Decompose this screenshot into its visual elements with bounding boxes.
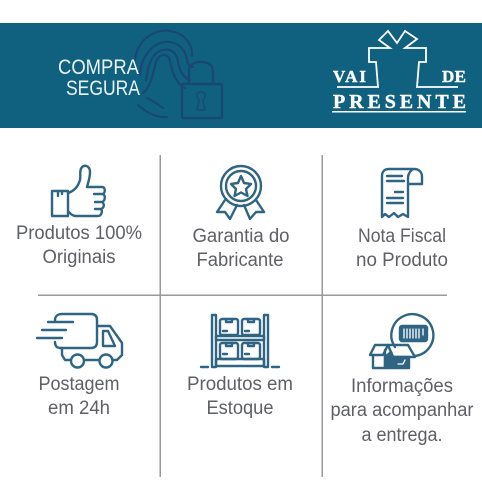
- icon: medal: [217, 166, 264, 219]
- text: Produtos em: [187, 374, 293, 395]
- logo words: DE: [442, 67, 466, 86]
- panel: postagem: [37, 314, 122, 419]
- logo words: VAI: [333, 67, 366, 86]
- panel: informacoes: [330, 314, 474, 446]
- banner: [0, 23, 482, 128]
- text: Postagem: [38, 374, 120, 395]
- heading: compra segura: [58, 56, 140, 100]
- text: Produtos 100%: [16, 223, 142, 244]
- text: Nota Fiscal: [358, 226, 446, 247]
- icon: warehouse shelf: [201, 315, 279, 367]
- panel: garantia: [192, 166, 290, 271]
- icon: gift box outline: [337, 31, 458, 87]
- panel: nota fiscal: no Produto: [356, 250, 448, 271]
- heading: compra segura: COMPRA: [58, 56, 139, 79]
- text: Garantia do: [192, 226, 290, 247]
- panel: produtos originais: [16, 166, 142, 268]
- panel: postagem: em 24h: [48, 398, 110, 419]
- icon: receipt: [382, 169, 422, 217]
- icon: thumbs up: [52, 166, 105, 216]
- icon: padlock: [182, 62, 222, 118]
- logo words: PRESENTE: [333, 91, 466, 113]
- panel: garantia: Fabricante: [196, 250, 284, 271]
- icon: truck: [37, 314, 122, 368]
- text: Informações: [351, 376, 453, 397]
- panel: informacoes: para acompanhar: [330, 400, 474, 421]
- logo words: [333, 67, 466, 113]
- icon: fingerprint: [135, 31, 193, 117]
- panel: estoque: [187, 315, 293, 419]
- panel: produtos originais: Originais: [42, 247, 116, 268]
- panel: informacoes: a entrega.: [362, 425, 442, 446]
- panel: estoque: Estoque: [206, 398, 274, 419]
- icon: package and barcode: [370, 314, 433, 368]
- panel: nota fiscal: [356, 169, 448, 271]
- heading: compra segura: SEGURA: [66, 77, 140, 100]
- logo: vai de presente: [332, 31, 466, 113]
